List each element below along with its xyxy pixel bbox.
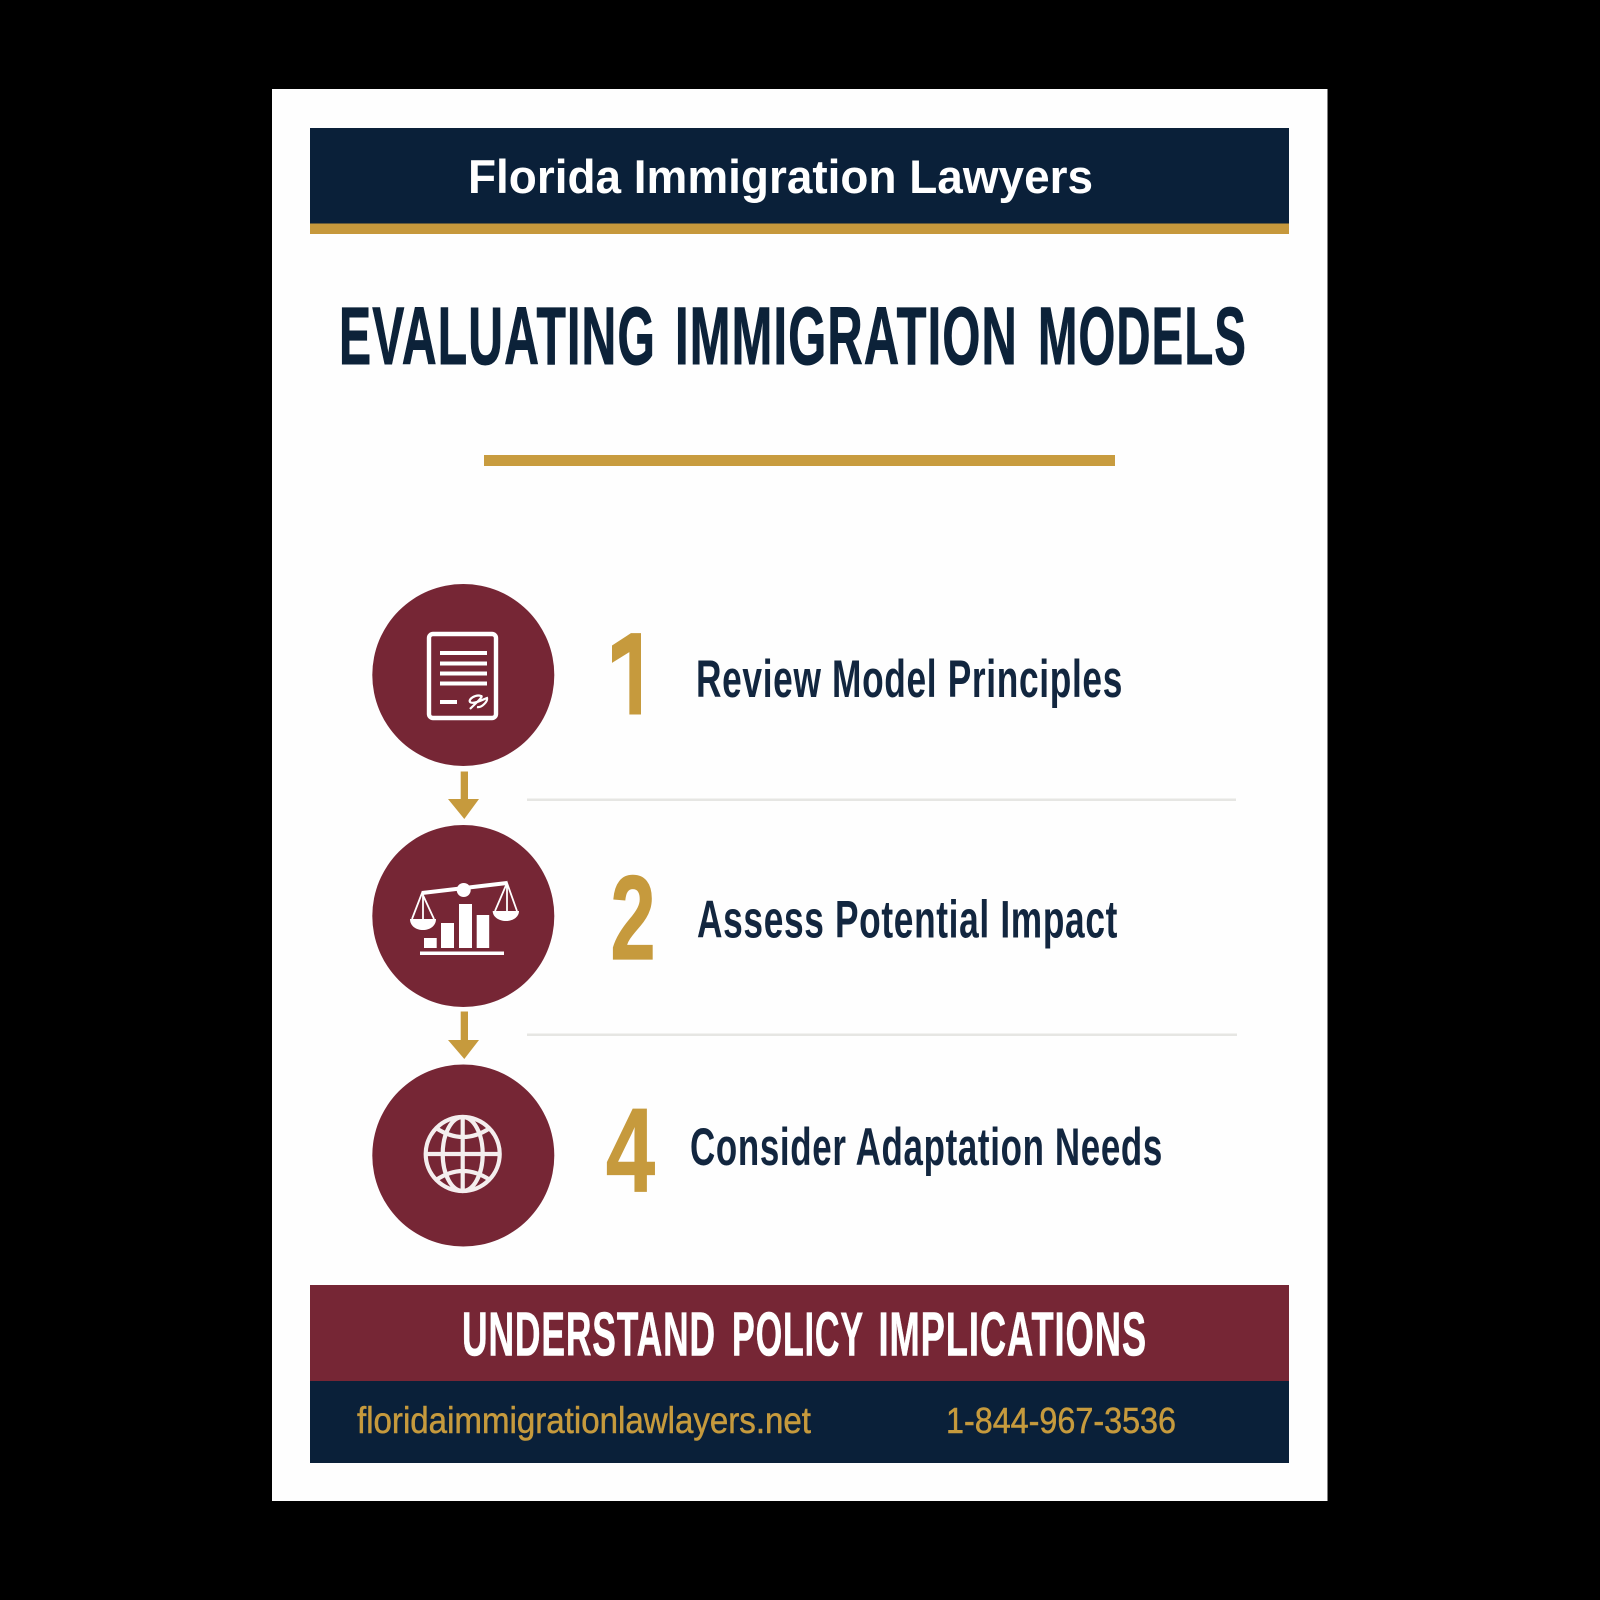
header banner (310, 128, 1289, 234)
footer heading: POLICY (732, 1300, 864, 1370)
icon: globe in maroon circle (372, 1064, 554, 1246)
panel: white card (272, 89, 1328, 1501)
title: EVALUATING (339, 291, 656, 382)
number 1: 1 (596, 603, 677, 764)
arrow 2 (448, 1012, 479, 1059)
footer heading (462, 1300, 1147, 1370)
icon: scales and bars in maroon circle (372, 825, 554, 1007)
label: Consider Adaptation Needs (690, 1118, 1163, 1177)
footer heading: IMPLICATIONS (878, 1300, 1147, 1370)
step 4: consider adaptation needs (372, 1064, 1163, 1246)
number 4: 4 (606, 1084, 655, 1217)
step 1: review model principles (372, 584, 1123, 766)
divider (527, 798, 1236, 801)
title: MODELS (1038, 291, 1247, 382)
header text: Florida Immigration Lawyers (468, 150, 1093, 203)
title: IMMIGRATION (675, 291, 1018, 382)
title underline (484, 455, 1115, 466)
title (339, 291, 1247, 382)
phone: 1-844-967-3536 (946, 1400, 1176, 1441)
label: Review Model Principles (696, 650, 1123, 709)
step 2: assess potential impact (372, 825, 1118, 1007)
arrow 1 (448, 772, 479, 819)
divider (527, 1034, 1237, 1036)
website: floridaimmigrationlawlayers.net (357, 1400, 812, 1441)
number 2: 2 (610, 851, 656, 985)
icon: document in maroon circle (372, 584, 554, 766)
footer contact bar (310, 1381, 1289, 1463)
footer banner: call to action (310, 1285, 1289, 1381)
footer heading: UNDERSTAND (462, 1300, 716, 1370)
label: Assess Potential Impact (697, 890, 1118, 950)
